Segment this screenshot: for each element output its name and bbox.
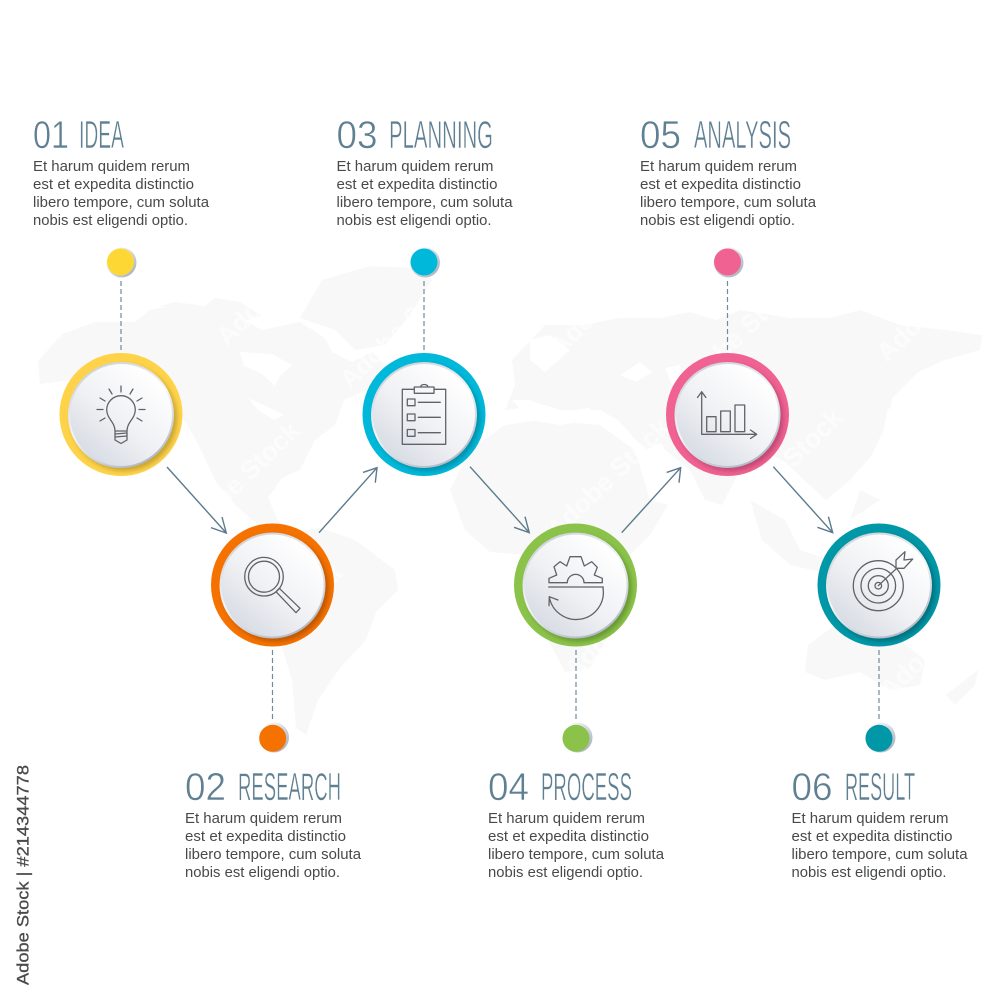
- heading: 04 process: [488, 766, 632, 809]
- heading: 06 result: 06: [792, 766, 832, 809]
- watermark: Adobe Stock: [850, 412, 986, 544]
- heading: 03 planning: PLANNING: [389, 114, 493, 157]
- node: analysis: [666, 353, 789, 476]
- step 06 text: RESULT: [845, 766, 915, 809]
- heading: 03 planning: 03: [336, 114, 378, 157]
- body text: Et harum quidem rerum: [185, 811, 342, 827]
- body text: libero tempore, cum soluta: [640, 195, 817, 211]
- body text: libero tempore, cum soluta: [792, 847, 968, 863]
- dot: research: [259, 722, 289, 752]
- step 05 text: [640, 114, 817, 229]
- arrow: process to analysis: [622, 468, 681, 533]
- body text: est et expedita distinctio: [488, 829, 649, 845]
- heading: 06 result: [792, 766, 915, 809]
- body text: Et harum quidem rerum: [640, 159, 797, 175]
- body text: est et expedita distinctio: [792, 829, 952, 845]
- heading: 01 idea: 01: [33, 114, 69, 157]
- step 01 text: [33, 114, 210, 229]
- icon: clipboard checklist: [402, 384, 446, 444]
- body text: [33, 159, 210, 229]
- body text: libero tempore, cum soluta: [336, 195, 513, 211]
- body text: est et expedita distinctio: [185, 829, 346, 845]
- body text: nobis est eligendi optio.: [336, 213, 492, 229]
- connector: 04 dashed line: [575, 650, 577, 720]
- body text: Et harum quidem rerum: [336, 159, 494, 175]
- node: result: [818, 524, 940, 646]
- node: process: [514, 524, 637, 646]
- dot: process: [562, 722, 592, 752]
- icon: target with arrow: [853, 552, 913, 611]
- body text: libero tempore, cum soluta: [185, 847, 362, 863]
- step 03 text: [336, 114, 513, 229]
- step 04 text: PROCESS: [541, 766, 632, 809]
- arrow: research to planning: [319, 468, 377, 533]
- heading: 04 process: 04: [488, 766, 529, 809]
- watermark: Adobe Stock: [540, 412, 676, 544]
- body text: nobis est eligendi optio.: [640, 213, 795, 229]
- body text: Et harum quidem rerum: [33, 159, 190, 175]
- body text: libero tempore, cum soluta: [33, 195, 210, 211]
- dot: planning: [410, 248, 440, 278]
- heading: 02 research: 02: [185, 766, 226, 809]
- body text: nobis est eligendi optio.: [185, 865, 340, 881]
- watermark: Adobe Stock: [213, 557, 349, 689]
- watermark: [0, 219, 1000, 739]
- watermark: Adobe Stock: [46, 382, 182, 514]
- dot: analysis: [714, 248, 744, 278]
- body text: libero tempore, cum soluta: [488, 847, 665, 863]
- body text: Et harum quidem rerum: [488, 811, 645, 827]
- watermark: Adobe Stock: [0, 252, 136, 384]
- arrow: planning to process: [470, 467, 529, 533]
- body text: [488, 811, 665, 881]
- icon: gear with cycle arrow: [549, 557, 603, 620]
- step 02 text: RESEARCH: [238, 766, 341, 809]
- connector: 05 dashed line: [726, 281, 728, 351]
- step 04 text: [488, 766, 665, 881]
- body text: nobis est eligendi optio.: [792, 865, 946, 881]
- body text: [792, 811, 968, 881]
- connector: 01 dashed line: [120, 281, 122, 351]
- dot: result: [866, 722, 896, 752]
- dot: idea: [106, 248, 136, 278]
- connector: 02 dashed line: [272, 650, 274, 720]
- watermark: Adobe Stock: [376, 389, 512, 521]
- watermark: Adobe Stock: [333, 262, 469, 394]
- watermark: Adobe Stock: [558, 552, 694, 684]
- heading: 02 research: [185, 766, 341, 809]
- body text: Et harum quidem rerum: [792, 811, 948, 827]
- icon: light bulb: [97, 386, 145, 444]
- icon: magnifier: [245, 557, 300, 613]
- connector: 03 dashed line: [423, 281, 425, 351]
- body text: [640, 159, 817, 229]
- heading: 05 analysis: ANALYSIS: [694, 114, 791, 157]
- watermark: Adobe Stock: [670, 269, 806, 401]
- stock id side label: Adobe Stock | #214344778: [14, 765, 32, 985]
- arrow: idea to research: [167, 467, 226, 533]
- heading: 03 planning: [336, 114, 493, 157]
- step 06 text: [792, 766, 968, 881]
- node: idea: [60, 353, 182, 476]
- map cut-outs: seas and lakes: [240, 335, 684, 425]
- watermark: Adobe Stock: [170, 415, 306, 547]
- watermark: Adobe Stock: [713, 402, 849, 534]
- body text: est et expedita distinctio: [640, 177, 801, 193]
- body text: nobis est eligendi optio.: [488, 865, 643, 881]
- icon: bar chart: [698, 392, 757, 438]
- heading: 05 analysis: [640, 114, 791, 157]
- heading: 01 idea: [33, 114, 124, 157]
- body text: nobis est eligendi optio.: [33, 213, 188, 229]
- watermark: Adobe Stock: [343, 597, 479, 729]
- node: research: [211, 524, 334, 646]
- heading: 05 analysis: 05: [640, 114, 681, 157]
- watermark: Adobe Stock: [210, 219, 346, 351]
- connector: 06 dashed line: [878, 650, 880, 720]
- node: planning: [362, 353, 486, 476]
- watermark: Adobe Stock: [543, 229, 679, 361]
- arrow: analysis to result: [773, 467, 833, 533]
- body text: [185, 811, 362, 881]
- step 02 text: [185, 766, 362, 881]
- step 01 text: IDEA: [79, 114, 124, 157]
- body text: [336, 159, 513, 229]
- watermark: Adobe Stock: [673, 607, 809, 739]
- body text: est et expedita distinctio: [33, 177, 194, 193]
- world map: [38, 266, 982, 735]
- body text: est et expedita distinctio: [336, 177, 498, 193]
